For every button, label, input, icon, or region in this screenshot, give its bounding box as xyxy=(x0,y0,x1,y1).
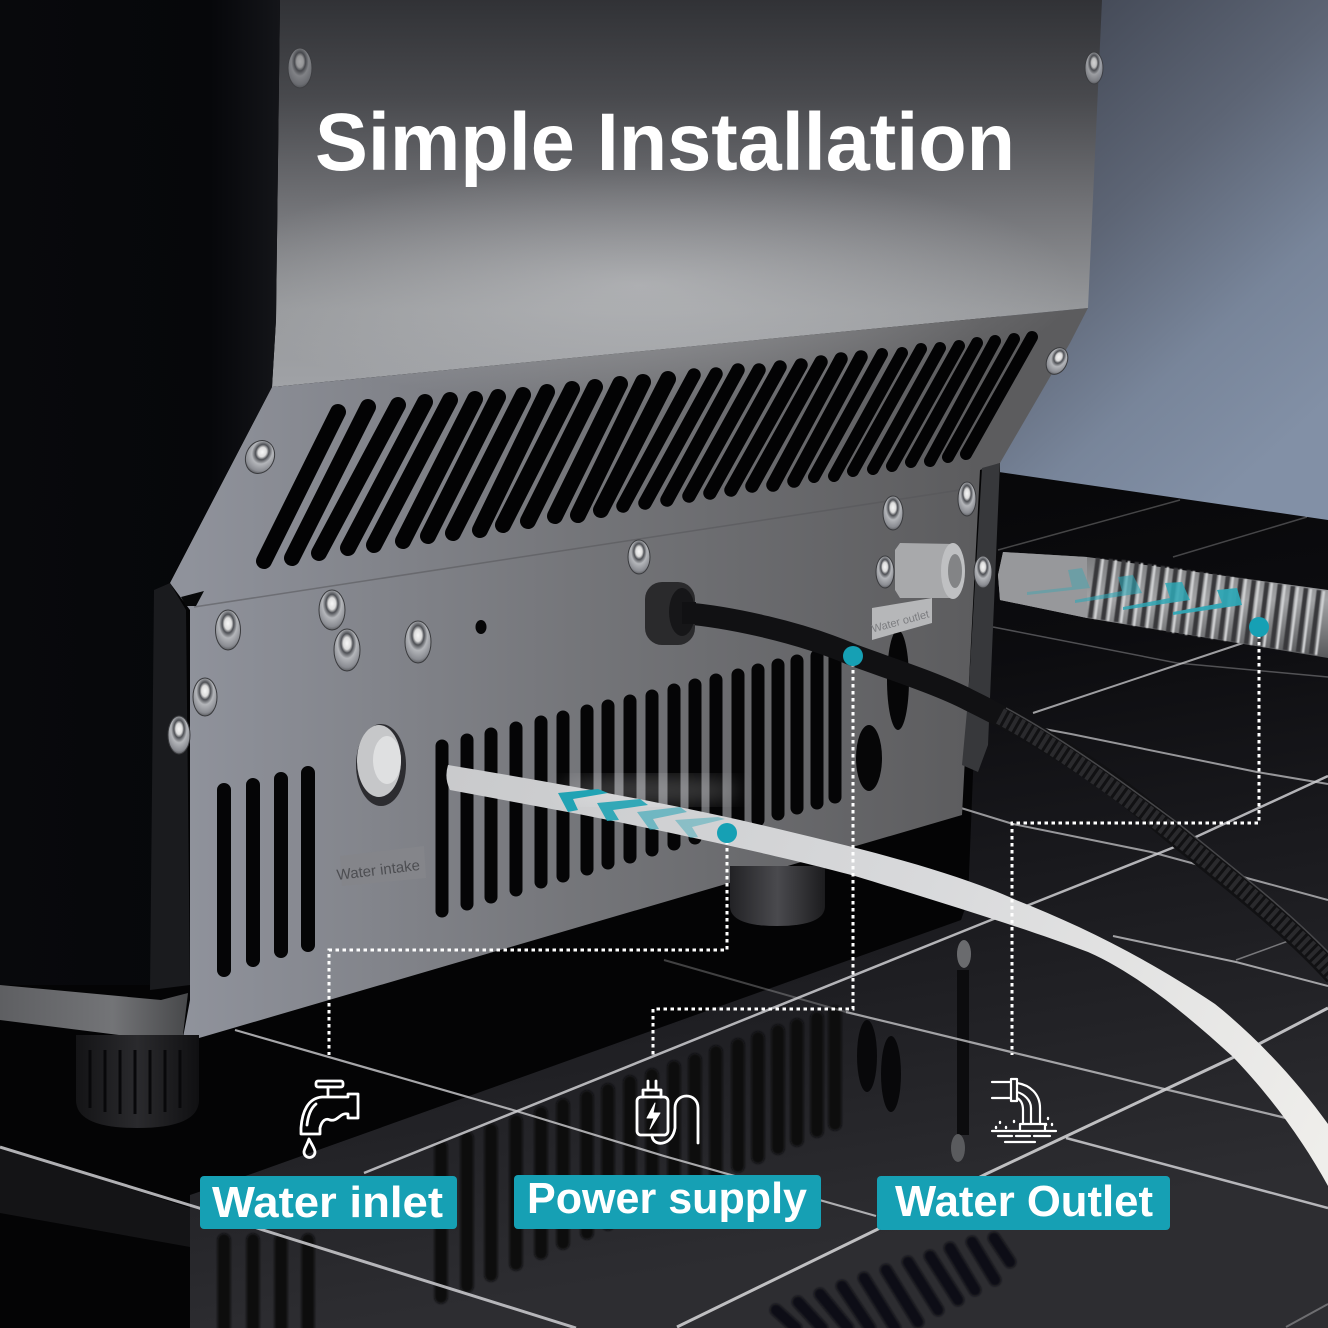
white water inlet hose xyxy=(446,765,1328,1186)
bracket notch xyxy=(181,591,204,606)
reflected base strip xyxy=(0,1147,190,1247)
water outlet fitting xyxy=(895,543,965,599)
knockout holes xyxy=(476,620,909,791)
upper rear panel xyxy=(272,0,1102,387)
corrugated drain hose xyxy=(998,552,1328,658)
cable far section sheen xyxy=(1000,716,1328,975)
sticker: water intake: Water intake xyxy=(336,857,421,884)
centre slots xyxy=(623,357,861,506)
flow arrows on drain hose xyxy=(1027,568,1242,615)
reflected screw upper xyxy=(957,940,971,968)
lower vent slots xyxy=(442,652,835,911)
reflected left vent slots xyxy=(224,1240,308,1328)
right foot xyxy=(730,866,825,926)
floor reflection of machine xyxy=(0,940,1010,1328)
right side bracket xyxy=(962,463,1000,772)
connector: water outlet xyxy=(1012,617,1269,1055)
clear hose end xyxy=(998,552,1087,618)
sticker: water outlet xyxy=(871,598,932,640)
lower rear panel xyxy=(170,308,1088,1043)
panel highlight xyxy=(200,165,1080,405)
label: water outlet: Water Outlet xyxy=(895,1177,1153,1226)
connector: power supply xyxy=(653,646,863,1055)
floor grout lines xyxy=(0,500,1328,1328)
hose body xyxy=(998,552,1328,658)
left foot xyxy=(76,1035,199,1128)
left slots xyxy=(264,379,668,561)
black shadow region under machine xyxy=(0,470,985,1328)
cable body xyxy=(683,613,1328,975)
label: power supply: Power supply xyxy=(527,1174,808,1223)
tiled floor xyxy=(0,470,1328,1328)
water inlet fitting xyxy=(356,724,406,806)
reflected knockout holes xyxy=(857,1020,877,1092)
background wall xyxy=(1000,0,1328,540)
ribs dark xyxy=(1090,558,1319,654)
black power cable xyxy=(683,613,1328,975)
flow arrows on inlet hose xyxy=(558,789,725,838)
icon: water tap xyxy=(301,1081,358,1158)
machine feet xyxy=(76,866,825,1128)
screws xyxy=(168,48,1103,754)
label: water inlet: Water inlet xyxy=(212,1178,443,1227)
sticker: water outlet: Water outlet xyxy=(871,609,931,635)
reflected screw lower xyxy=(951,1134,965,1162)
cable grommet xyxy=(645,582,696,645)
left side bracket xyxy=(150,583,204,990)
connector: water inlet xyxy=(329,823,737,1055)
upper vent slots xyxy=(264,337,1032,561)
reflected lower vent slots xyxy=(441,1012,835,1297)
left vent slots xyxy=(224,773,308,970)
reflected upper vent slots xyxy=(776,1238,1010,1328)
icon: water outfall pipe xyxy=(992,1079,1056,1142)
sticker: water intake xyxy=(336,846,426,886)
left black side of machine xyxy=(0,0,280,985)
reflected bracket xyxy=(957,970,969,1135)
left foot ribs xyxy=(90,1050,180,1114)
right slots xyxy=(814,337,1032,477)
ribs light xyxy=(1095,559,1324,655)
silver base strip xyxy=(0,985,188,1043)
title: Simple Installation xyxy=(315,97,1015,188)
icon: power bank with cable xyxy=(637,1081,698,1143)
cable upper edge highlight xyxy=(1006,708,1328,967)
